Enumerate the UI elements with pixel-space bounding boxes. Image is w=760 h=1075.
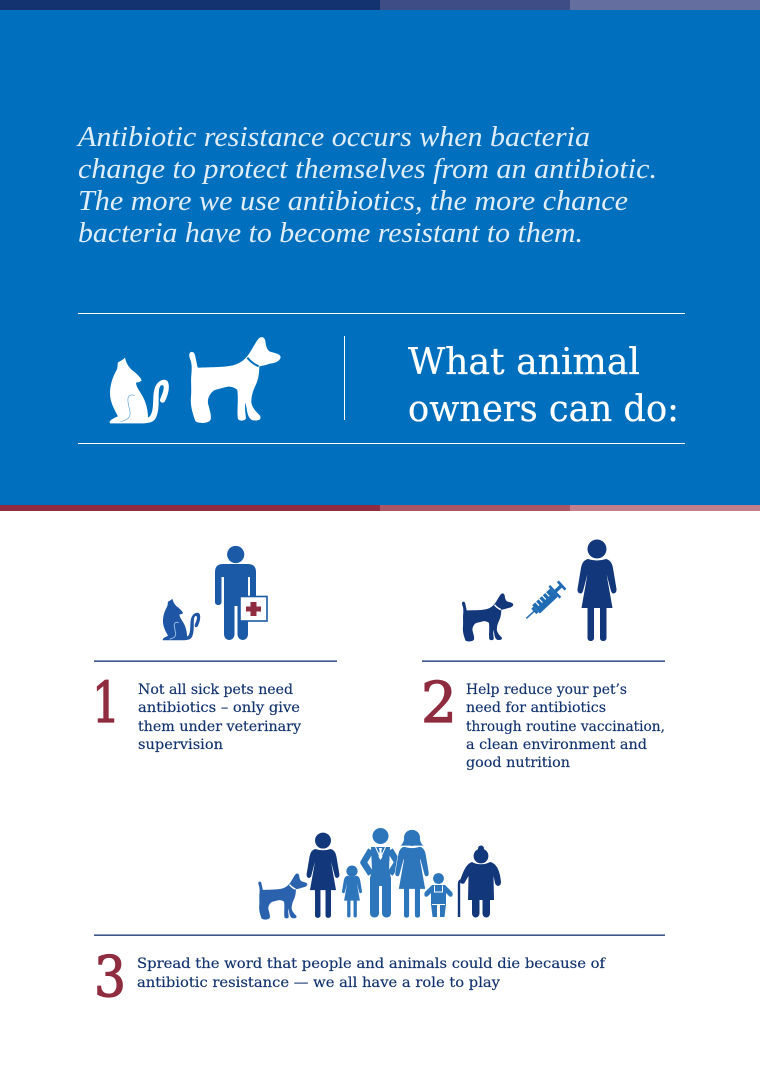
step 1 text: supervision	[138, 737, 223, 753]
panel: step 1	[92, 546, 337, 753]
step 1 text: them under veterinary	[138, 719, 301, 735]
step 3 text	[137, 956, 607, 991]
heading: What animal	[408, 342, 640, 383]
icon: dog, syringe and woman	[462, 540, 617, 641]
step 1 text: Not all sick pets need	[138, 682, 293, 698]
step 2 text: through routine vaccination,	[466, 719, 665, 735]
panel: blue header	[0, 10, 760, 505]
intro text: change to protect themselves from an antibiotic.	[78, 153, 657, 185]
number 2: 2	[421, 671, 457, 736]
step 2 text: need for antibiotics	[466, 700, 606, 716]
panel: step 3	[94, 828, 665, 1010]
step 2 text: Help reduce your pet’s	[466, 682, 627, 698]
intro text: bacteria have to become resistant to them.	[78, 217, 583, 249]
heading: owners can do:	[408, 389, 679, 430]
girl	[342, 865, 362, 918]
dog	[258, 874, 307, 920]
panel: step 2	[421, 540, 665, 771]
icon: family group with dog	[258, 828, 501, 920]
icon: white dog	[189, 337, 281, 423]
boy	[424, 873, 453, 917]
number 3: 3	[94, 945, 126, 1010]
step 2 text: good nutrition	[466, 755, 570, 771]
step 1 text: antibiotics – only give	[138, 700, 300, 716]
top colour bar	[0, 0, 760, 10]
woman dark	[307, 833, 339, 918]
intro text	[76, 121, 657, 249]
red divider bar	[0, 505, 760, 511]
heading	[408, 342, 679, 430]
step 3 text: Spread the word that people and animals could die because of	[137, 956, 607, 972]
number 1: 1	[92, 671, 120, 736]
intro text: Antibiotic resistance occurs when bacteria	[76, 121, 590, 153]
icon: cat and vet with medical kit	[163, 546, 267, 640]
grandmother with cane	[459, 846, 501, 918]
step 3 text: antibiotic resistance — we all have a role to play	[137, 975, 500, 991]
step 2 text: a clean environment and	[466, 737, 647, 753]
intro text: The more we use antibiotics, the more chance	[78, 185, 628, 217]
woman with hair	[395, 830, 429, 918]
step 1 text	[138, 682, 301, 753]
step 2 text	[466, 682, 665, 771]
icon: white cat	[110, 358, 169, 423]
man in suit	[364, 828, 398, 918]
